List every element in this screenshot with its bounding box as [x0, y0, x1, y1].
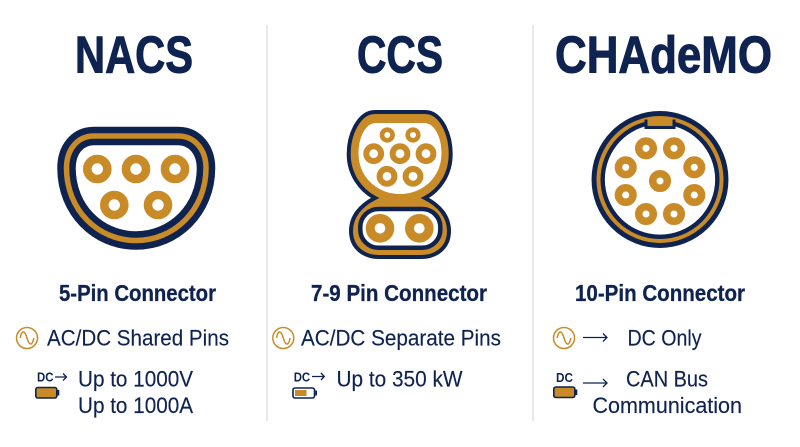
icon: DC battery: DC	[294, 370, 311, 384]
text: AC/DC Shared Pins: AC/DC Shared Pins	[47, 326, 229, 350]
text: Up to 1000V / 1000A: Up to 1000V	[78, 366, 193, 392]
icon: DC battery with arrow	[554, 370, 607, 398]
panel: NACS	[16, 26, 229, 418]
icon: CHAdeMO connector	[598, 118, 722, 241]
icon: DC battery	[293, 370, 324, 398]
text: Up to 1000V / 1000A: Up to 1000A	[78, 393, 193, 418]
panel: CHAdeMO	[554, 26, 772, 418]
subtitle: 5-Pin Connector: 5-Pin Connector	[59, 280, 216, 306]
icon: DC battery	[36, 370, 66, 398]
icon: AC wave with arrow	[554, 328, 607, 348]
text: AC/DC Separate Pins: AC/DC Separate Pins	[301, 326, 501, 350]
icon: DC battery: DC	[37, 370, 54, 384]
text: CAN Bus Communication	[592, 366, 742, 418]
text: Up to 1000V / 1000A	[78, 366, 193, 418]
panel: CCS	[273, 26, 501, 398]
text: Up to 350 kW: Up to 350 kW	[336, 366, 463, 392]
text: CAN Bus Communication: CAN Bus	[626, 366, 708, 392]
subtitle: 7-9 Pin Connector: 7-9 Pin Connector	[311, 280, 487, 306]
title: NACS: NACS	[75, 26, 193, 84]
icon: CCS connector	[349, 112, 451, 257]
subtitle: 10-Pin Connector: 10-Pin Connector	[575, 280, 745, 306]
icon: AC wave	[16, 328, 38, 348]
text: DC Only: DC Only	[628, 326, 702, 350]
icon: NACS connector	[66, 136, 206, 240]
title: CCS: CCS	[357, 26, 443, 84]
icon: AC wave	[273, 328, 294, 348]
text: CAN Bus Communication: Communication	[592, 393, 742, 418]
icon: DC battery with arrow: DC	[556, 370, 574, 385]
